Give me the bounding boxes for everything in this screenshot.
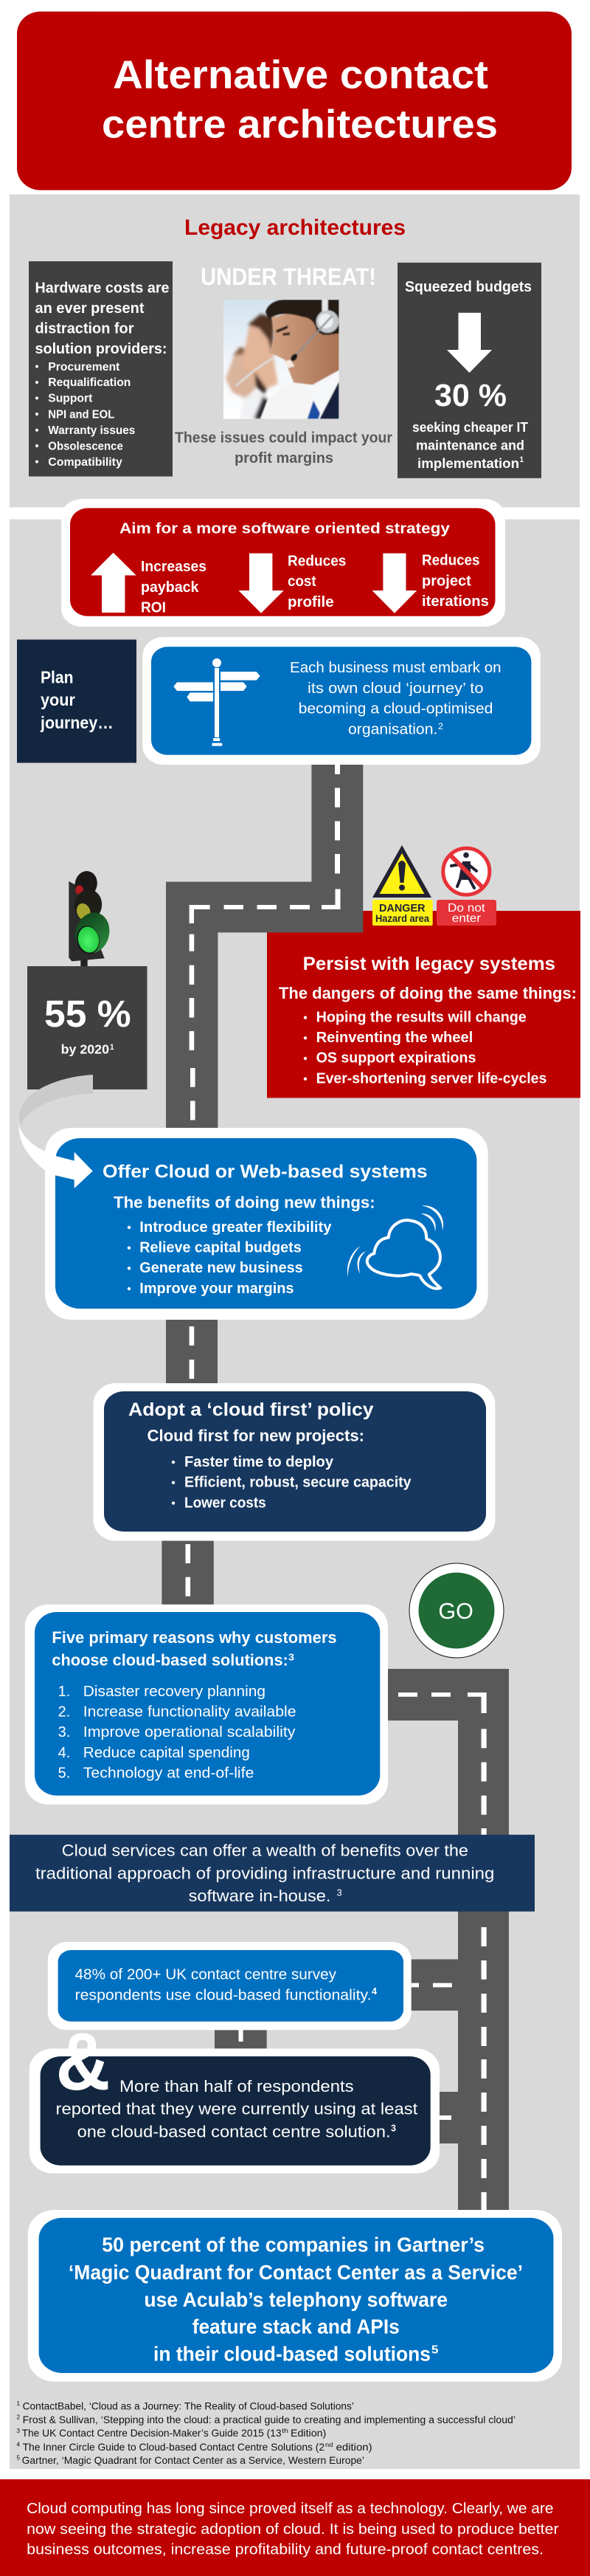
panel: gartner magic quadrant: in their cloud-based solutions: [153, 2343, 431, 2365]
panel: gartner magic quadrant: ‘Magic Quadrant for Contact Center as a Service’: [69, 2261, 523, 2284]
photo: contact centre agents with headsets: [223, 300, 339, 419]
panel: squeezed budgets: seeking cheaper IT: [412, 420, 528, 435]
panel: five primary reasons: [25, 1605, 388, 1805]
panel: squeezed budgets: [398, 263, 541, 478]
callout: software oriented strategy: Reduces: [422, 553, 479, 569]
panel: gartner magic quadrant: 50 percent of the companies in Gartner’s: [102, 2234, 485, 2256]
panel: journey background: [10, 520, 580, 2469]
banner: wealth of benefits: traditional approach of providing infrastructure and running: [35, 1864, 494, 1882]
icon: down arrow cost: [239, 554, 284, 613]
panel: 48 percent survey: respondents use cloud-based functionality.: [75, 1987, 372, 2003]
footer: conclusion: Cloud computing has long since proved itself as a technology. Clearly, we are: [27, 2501, 553, 2517]
footer: conclusion: now seeing the strategic adoption of cloud. It is being used to produce better: [27, 2521, 559, 2538]
callout: software oriented strategy: payback: [141, 579, 199, 596]
panel: more than half of respondents: reported that they were currently using at least: [56, 2100, 418, 2118]
panel: persist with legacy systems: The dangers of doing the same things:: [279, 984, 577, 1002]
road: from offer cloud to cloud first: [166, 1320, 218, 1383]
panel: gartner magic quadrant: use Aculab’s telephony software: [144, 2288, 448, 2311]
panel: gartner magic quadrant: [28, 2210, 562, 2382]
text: profit margins warning: These issues could impact your: [175, 430, 392, 447]
text: offer cloud or web-based systems: Offer Cloud or Web-based systems: [103, 1162, 428, 1182]
panel: persist with legacy systems: Persist with legacy systems: [303, 954, 555, 974]
panel: legacy architectures background: [10, 194, 580, 507]
banner: wealth of benefits: [10, 1835, 535, 1912]
panel: hardware costs: Obsolescence: [48, 440, 123, 452]
text: footnotes: 3: [16, 2427, 20, 2434]
panel: 48 percent survey: [48, 1942, 412, 2030]
panel: more than half of respondents: More than half of respondents: [119, 2077, 354, 2095]
banner: wealth of benefits: Cloud services can offer a wealth of benefits over the: [62, 1842, 468, 1860]
panel: hardware costs: Support: [48, 393, 93, 405]
callout: software oriented strategy: [61, 499, 505, 627]
panel: squeezed budgets: maintenance and: [416, 438, 524, 452]
panel: persist with legacy systems: Ever-shortening server life-cycles: [316, 1070, 546, 1086]
panel: adopt a cloud first policy: Adopt a ‘cloud first’ policy: [128, 1399, 374, 1420]
text: footnotes: The UK Contact Centre Decision-Maker’s Guide 2015 (13: [22, 2428, 282, 2439]
panel: persist with legacy systems: [267, 911, 580, 1098]
text: offer cloud or web-based systems: Introduce greater flexibility: [139, 1219, 332, 1236]
panel: more than half of respondents: one cloud-based contact centre solution.: [77, 2122, 391, 2141]
panel: 48 percent survey: 4: [372, 1986, 377, 1997]
road: spur to 48 percent card: [411, 1959, 458, 2011]
icon: go sign: [409, 1563, 504, 1658]
callout: software oriented strategy: Increases: [141, 559, 206, 575]
panel: plan your journey: journey…: [40, 713, 114, 732]
panel: five primary reasons: choose cloud-based solutions:: [52, 1651, 288, 1670]
icon: danger hazard sign: DANGER: [379, 902, 426, 915]
text: footnotes: 4: [16, 2440, 20, 2448]
callout: software oriented strategy: ROI: [141, 599, 166, 616]
panel: squeezed budgets: Squeezed budgets: [405, 279, 532, 295]
panel: hardware costs: Hardware costs are: [35, 279, 170, 296]
panel: five primary reasons: Technology at end-of-life: [83, 1766, 254, 1782]
panel: adopt a cloud first policy: Faster time to deploy: [184, 1454, 334, 1470]
panel: hardware costs: Compatibility: [48, 456, 122, 469]
text: offer cloud or web-based systems: Generate new business: [139, 1260, 303, 1276]
callout: software oriented strategy: profile: [288, 594, 334, 610]
panel: squeezed budgets: implementation: [417, 456, 519, 471]
icon: danger hazard sign: [372, 845, 433, 926]
banner: wealth of benefits: 3: [337, 1887, 342, 1898]
icon: up arrow: [91, 553, 136, 613]
panel: signpost card: Each business must embark on: [290, 660, 502, 676]
text: footnotes: Edition): [291, 2428, 326, 2439]
panel: hardware costs: NPI and EOL: [48, 409, 115, 421]
icon: ampersand: &: [56, 2017, 111, 2107]
road: from cloud first to five reasons: [162, 1541, 214, 1605]
panel: five primary reasons: Reduce capital spending: [83, 1745, 250, 1761]
panel: plan your journey: your: [41, 690, 75, 709]
icon: do not enter sign: [437, 848, 496, 926]
text: footnotes: The Inner Circle Guide to Cloud-based Contact Centre Solutions (2: [23, 2442, 324, 2453]
panel: hardware costs: an ever present: [35, 300, 145, 317]
panel: hardware costs: Warranty issues: [48, 424, 135, 437]
text: footnotes: edition): [336, 2442, 372, 2453]
text: footnotes: [16, 2400, 516, 2466]
panel: 55 percent by 2020: [27, 966, 148, 1089]
panel: 48 percent survey: 48% of 200+ UK contact centre survey: [75, 1967, 336, 1983]
panel: persist with legacy systems: Reinventing the wheel: [316, 1030, 473, 1046]
title banner: centre architectures: [102, 103, 498, 147]
text: footnotes: 2: [16, 2414, 20, 2421]
text: footnotes: 1: [16, 2400, 20, 2407]
icon: go sign: GO: [438, 1598, 473, 1624]
title banner: Alternative contact: [113, 53, 488, 97]
callout: software oriented strategy: cost: [288, 574, 316, 590]
panel: adopt a cloud first policy: Efficient, robust, secure capacity: [184, 1475, 412, 1491]
icon: down arrow iterations: [372, 554, 417, 613]
text: footnotes: th: [282, 2427, 288, 2434]
panel: more than half of respondents: [30, 2017, 440, 2173]
panel: five primary reasons: Disaster recovery planning: [83, 1684, 266, 1700]
text: offer cloud or web-based systems: Improve your margins: [139, 1281, 294, 1297]
panel: signpost card: [142, 637, 541, 765]
icon: do not enter sign: enter: [452, 912, 481, 925]
panel: five primary reasons: Five primary reasons why customers: [52, 1628, 337, 1647]
title banner: [17, 12, 572, 190]
text: footnotes: Gartner, ‘Magic Quadrant for Contact Center as a Service, Western Europe’: [22, 2455, 364, 2466]
panel: five primary reasons: 3.: [58, 1724, 70, 1740]
text: footnotes: ContactBabel, ‘Cloud as a Journey: The Reality of Cloud-based Solutions’: [23, 2401, 354, 2412]
text: footnotes: 5: [16, 2453, 20, 2461]
panel: signpost card: its own cloud ‘journey’ to: [308, 681, 484, 697]
panel: five primary reasons: 4.: [58, 1745, 70, 1761]
panel: 55 percent by 2020: 55 %: [44, 993, 131, 1035]
icon: danger hazard sign: Hazard area: [375, 913, 429, 924]
panel: hardware costs: Requalification: [48, 376, 131, 389]
panel: squeezed budgets: 30 %: [434, 378, 507, 413]
panel: plan your journey: Plan: [41, 667, 74, 686]
callout: software oriented strategy: iterations: [422, 593, 489, 610]
panel: signpost card: 2: [438, 721, 443, 731]
road: spur to respondents card: [440, 2092, 458, 2143]
heading: under threat: UNDER THREAT!: [201, 264, 376, 290]
text: offer cloud or web-based systems: The benefits of doing new things:: [114, 1194, 375, 1212]
icon: down arrow: [447, 313, 492, 373]
panel: five primary reasons: 3: [288, 1652, 294, 1662]
panel: five primary reasons: Increase functionality available: [83, 1704, 296, 1720]
panel: hardware costs: [29, 261, 173, 477]
callout: software oriented strategy: project: [422, 573, 471, 589]
road: from plan to offer cloud: [166, 754, 363, 1128]
panel: five primary reasons: Improve operational scalability: [83, 1724, 296, 1740]
text: offer cloud or web-based systems: [103, 1162, 428, 1297]
panel: hardware costs: distraction for: [35, 320, 134, 337]
panel: hardware costs: solution providers:: [35, 340, 167, 357]
panel: offer cloud white frame: [45, 1128, 488, 1320]
icon: traffic light: [69, 869, 114, 967]
road: right-hand route from go sign: [388, 1669, 509, 2210]
heading: legacy architectures: Legacy architectures: [184, 216, 406, 240]
panel: five primary reasons: 1.: [58, 1684, 70, 1700]
panel: persist with legacy systems: Hoping the results will change: [316, 1009, 527, 1025]
callout: software oriented strategy: Reduces: [288, 554, 346, 570]
text: profit margins warning: [175, 430, 392, 466]
panel: signpost card: becoming a cloud-optimised: [299, 701, 493, 717]
text: offer cloud or web-based systems: Relieve capital budgets: [139, 1239, 302, 1256]
icon: signpost: [173, 658, 260, 746]
banner: wealth of benefits: software in-house.: [189, 1887, 330, 1905]
text: profit margins warning: profit margins: [235, 450, 333, 466]
icon: cloud speech bubble: [347, 1205, 443, 1289]
panel: gartner magic quadrant: 5: [431, 2344, 438, 2357]
text: footnotes: nd: [325, 2441, 333, 2448]
footer: conclusion: [0, 2479, 590, 2576]
panel: 55 percent by 2020: by 2020: [61, 1042, 109, 1057]
panel: adopt a cloud first policy: Cloud first for new projects:: [148, 1427, 364, 1445]
panel: more than half of respondents: 3: [391, 2122, 396, 2133]
panel: signpost card: organisation.: [348, 722, 437, 738]
callout: software oriented strategy: Aim for a more software oriented strategy: [119, 520, 451, 537]
panel: squeezed budgets: 1: [519, 455, 524, 464]
panel: five primary reasons: 5.: [58, 1766, 70, 1782]
text: footnotes: Frost & Sullivan, ‘Stepping into the cloud: a practical guide to creating and implementing a successful cloud’: [23, 2414, 516, 2425]
arrow: curved from 55 percent to cloud systems: [18, 1075, 93, 1188]
panel: adopt a cloud first policy: Lower costs: [184, 1495, 266, 1511]
panel: plan your journey: [17, 639, 136, 763]
panel: five primary reasons: 2.: [58, 1704, 70, 1720]
road: link between survey cards: [215, 2030, 267, 2049]
panel: hardware costs: Procurement: [48, 361, 120, 373]
footer: conclusion: business outcomes, increase profitability and future-proof contact centres.: [27, 2542, 544, 2558]
panel: adopt a cloud first policy: [93, 1383, 495, 1541]
panel: gartner magic quadrant: feature stack and APIs: [192, 2315, 400, 2338]
icon: do not enter sign: Do not: [448, 902, 485, 915]
panel: persist with legacy systems: OS support expirations: [316, 1050, 476, 1067]
panel: 55 percent by 2020: 1: [110, 1043, 114, 1052]
